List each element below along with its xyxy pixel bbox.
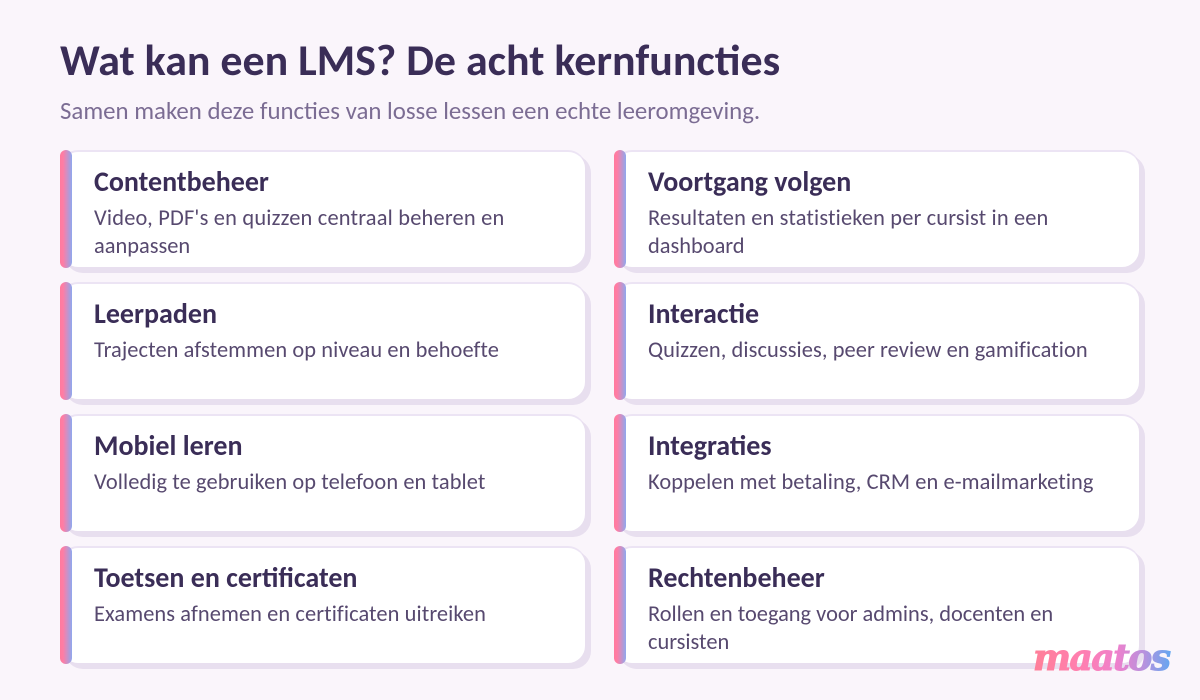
panel: Contentbeheer: Video, PDF's en quizzen centraal beheren en [94, 205, 504, 232]
panel: Leerpaden: Trajecten afstemmen op niveau en behoefte [94, 337, 499, 364]
panel: Leerpaden: Leerpaden [94, 296, 217, 331]
panel: Mobiel leren: Mobiel leren [94, 428, 242, 463]
panel: Contentbeheer: aanpassen [94, 233, 190, 260]
panel: Integraties [614, 414, 1140, 532]
subtitle: Samen maken deze functies van losse lessen een echte leeromgeving. [60, 95, 760, 126]
logo: maatos: maatos [1033, 637, 1171, 679]
panel: Rechtenbeheer: Rechtenbeheer [648, 560, 825, 595]
panel: Leerpaden [60, 282, 586, 400]
panel: Integraties: Koppelen met betaling, CRM en e-mailmarketing [648, 469, 1094, 496]
panel: Rechtenbeheer: Rollen en toegang voor admins, docenten en [648, 601, 1053, 628]
panel: Interactie: Quizzen, discussies, peer review en gamification [648, 337, 1088, 364]
panel: Rechtenbeheer [614, 546, 1140, 664]
panel: Contentbeheer [60, 150, 586, 268]
panel: Mobiel leren: Volledig te gebruiken op telefoon en tablet [94, 469, 485, 496]
panel: Toetsen en certificaten: Examens afnemen en certificaten uitreiken [94, 601, 486, 628]
panel: Integraties: Integraties [648, 428, 772, 463]
panel: Interactie: Interactie [648, 296, 759, 331]
panel: Contentbeheer: Contentbeheer [94, 164, 269, 199]
panel: Mobiel leren [60, 414, 586, 532]
panel: Voortgang volgen: dashboard [648, 233, 745, 260]
panel: Rechtenbeheer: cursisten [648, 629, 729, 656]
panel: Voortgang volgen [614, 150, 1140, 268]
panel: Voortgang volgen: Voortgang volgen [648, 164, 851, 199]
panel: Interactie [614, 282, 1140, 400]
panel: Voortgang volgen: Resultaten en statistieken per cursist in een [648, 205, 1048, 232]
panel: Toetsen en certificaten: Toetsen en certificaten [94, 560, 357, 595]
title: Wat kan een LMS? De acht kernfuncties [60, 33, 780, 87]
panel: Toetsen en certificaten [60, 546, 586, 664]
